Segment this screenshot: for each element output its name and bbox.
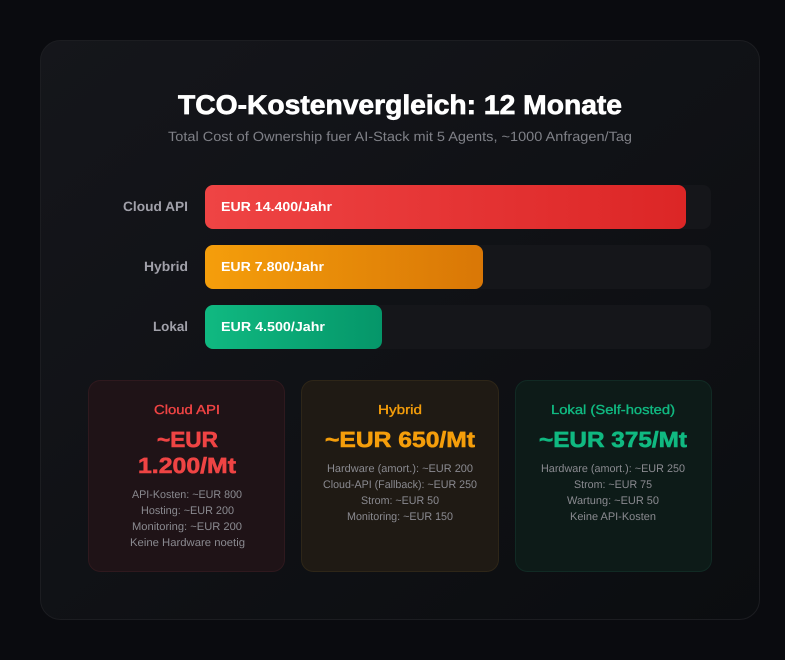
bar row: Hybrid <box>144 245 711 289</box>
cost breakdown: Wartung: ~EUR 50 <box>567 495 659 507</box>
monthly price: ~EUR 650/Mt <box>325 427 476 452</box>
cost breakdown: API-Kosten: ~EUR 800 <box>132 489 242 501</box>
cost breakdown <box>130 489 245 549</box>
monthly price: ~EUR 375/Mt <box>539 427 688 452</box>
cost breakdown <box>541 463 685 523</box>
cost breakdown: Keine Hardware noetig <box>130 537 245 549</box>
cost breakdown: Strom: ~EUR 50 <box>361 495 439 507</box>
bar row: Lokal: EUR 4.500/Jahr <box>221 319 325 334</box>
monthly price: ~EUR <box>157 427 218 452</box>
bar row: Lokal <box>153 305 711 349</box>
bar row: Lokal: Lokal <box>153 319 188 334</box>
panel: Lokal costs <box>516 380 712 572</box>
title: TCO-Kostenvergleich: 12 Monate <box>178 90 622 120</box>
bar row: Cloud API: Cloud API <box>123 199 188 214</box>
bar row: Cloud API: EUR 14.400/Jahr <box>221 199 332 214</box>
cost breakdown: Hardware (amort.): ~EUR 200 <box>327 463 473 475</box>
cost breakdown: Keine API-Kosten <box>570 511 656 523</box>
cost breakdown: Cloud-API (Fallback): ~EUR 250 <box>323 479 477 491</box>
cost breakdown: Strom: ~EUR 75 <box>574 479 652 491</box>
cost breakdown: Monitoring: ~EUR 200 <box>132 521 242 533</box>
monthly price <box>138 427 237 478</box>
card heading: Hybrid <box>378 402 422 417</box>
bar chart <box>123 185 711 349</box>
bar row: Hybrid: EUR 7.800/Jahr <box>221 259 324 274</box>
cost breakdown: Hosting: ~EUR 200 <box>141 505 234 517</box>
card heading: Lokal (Self-hosted) <box>551 402 675 417</box>
subtitle: Total Cost of Ownership fuer AI-Stack mit 5 Agents, ~1000 Anfragen/Tag <box>168 129 632 144</box>
cost breakdown: Hardware (amort.): ~EUR 250 <box>541 463 685 475</box>
bar row: Hybrid: Hybrid <box>144 259 188 274</box>
panel: Cloud API costs <box>88 380 284 572</box>
cost breakdown <box>323 463 477 523</box>
cost breakdown: Monitoring: ~EUR 150 <box>347 511 453 523</box>
monthly price: 1.200/Mt <box>138 453 237 478</box>
panel: Hybrid costs <box>302 380 498 572</box>
bar row: Cloud API <box>123 185 711 229</box>
card heading: Cloud API <box>154 402 220 417</box>
